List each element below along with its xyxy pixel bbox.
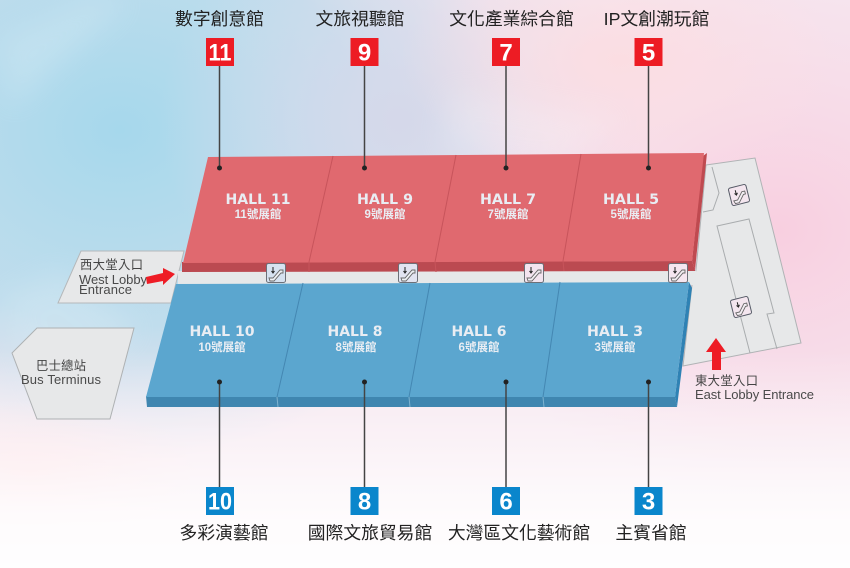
- text: west lobby label: [79, 258, 148, 297]
- text: bus terminus label: 巴士總站: [36, 358, 86, 373]
- hall 11 label: 11號展館: [235, 207, 281, 221]
- icon: escalator 6: [730, 296, 752, 318]
- text: east lobby label: East Lobby Entrance: [695, 387, 814, 402]
- callout: hall 7: 7: [499, 40, 513, 66]
- text: east lobby label: 東大堂入口: [695, 374, 758, 388]
- panel: central corridor: [178, 271, 696, 285]
- panel: bus terminus: [12, 328, 134, 419]
- hall 6 label: [452, 324, 506, 354]
- callout: hall 3: [615, 380, 687, 543]
- callout: hall 7: 文化產業綜合館: [449, 9, 574, 29]
- callout: hall 9: [316, 9, 404, 170]
- callout: hall 8: 國際文旅貿易館: [308, 523, 432, 543]
- callout: hall 8: [308, 380, 432, 543]
- callout: hall 6: 大灣區文化藝術館: [448, 523, 590, 543]
- callout: hall 9: 9: [358, 40, 371, 66]
- hall 3 label: HALL 3: [587, 324, 643, 340]
- hall 6 label: HALL 6: [452, 324, 506, 340]
- hall 8 label: 8號展館: [336, 340, 376, 354]
- text: bus terminus label: Bus Terminus: [21, 372, 102, 387]
- text: west lobby label: Entrance: [79, 282, 132, 297]
- callout: hall 10: 多彩演藝館: [180, 523, 268, 543]
- blue hall front face: [146, 396, 677, 407]
- blue hall roof: [146, 282, 689, 397]
- hall 9 label: 9號展館: [365, 207, 405, 221]
- hall 7 label: [480, 192, 536, 221]
- hall 8 label: [328, 324, 382, 354]
- callout: hall 6: 6: [499, 488, 513, 516]
- hall 6 label: 6號展館: [459, 340, 499, 354]
- callout: hall 5: 5: [642, 40, 655, 66]
- icon: escalator 3: [524, 264, 544, 282]
- callout: hall 10: [180, 380, 268, 543]
- hall 11 label: HALL 11: [226, 192, 290, 208]
- red hall side face: [692, 153, 707, 270]
- hall 5 label: HALL 5: [603, 192, 659, 208]
- hall 11 label: [226, 192, 290, 221]
- callout: hall 11: 數字創意館: [175, 9, 264, 29]
- hall 8 label: HALL 8: [328, 324, 382, 340]
- icon: escalator 4: [668, 264, 688, 282]
- blue hall side face: [675, 282, 692, 407]
- hall 5 label: 5號展館: [611, 207, 651, 221]
- callout: hall 8: 8: [358, 488, 371, 516]
- icon: escalator 2: [398, 264, 418, 282]
- panel: east lobby: [683, 158, 801, 366]
- hall 9 label: [357, 192, 413, 221]
- red hall front face: [182, 261, 695, 272]
- callout: hall 5: [604, 9, 709, 170]
- hall 10 label: [190, 324, 255, 354]
- icon: escalator 5: [728, 184, 750, 206]
- icon: escalator 1: [266, 264, 286, 282]
- arrow: east entrance: [706, 338, 726, 370]
- hall 3 label: [587, 324, 643, 354]
- hall 7 label: 7號展館: [488, 207, 528, 221]
- callout: hall 10: 10: [208, 488, 232, 516]
- callout: hall 3: 主賓省館: [615, 523, 687, 543]
- text: east lobby label: [695, 374, 814, 402]
- callout: hall 6: [448, 380, 590, 543]
- panel: blue halls: [146, 282, 692, 407]
- callout: hall 3: 3: [642, 488, 655, 516]
- callout: hall 9: 文旅視聽館: [316, 9, 404, 29]
- callout: hall 11: [175, 9, 264, 170]
- hall 5 label: [603, 192, 659, 221]
- text: west lobby label: 西大堂入口: [80, 258, 143, 272]
- text: west lobby label: West Lobby: [79, 272, 148, 287]
- callout: hall 11: 11: [208, 40, 232, 66]
- panel: red halls: [182, 153, 707, 272]
- hall 9 label: HALL 9: [357, 192, 413, 208]
- hall 7 label: HALL 7: [480, 192, 536, 208]
- callout: hall 7: [449, 9, 574, 170]
- arrow: west entrance: [146, 268, 175, 285]
- red hall roof: [183, 153, 704, 263]
- hall 10 label: HALL 10: [190, 324, 255, 340]
- hall 10 label: 10號展館: [198, 340, 246, 354]
- hall 3 label: 3號展館: [595, 340, 635, 354]
- callout: hall 5: IP文創潮玩館: [604, 9, 709, 29]
- panel: west lobby entrance: [58, 251, 184, 303]
- text: bus terminus label: [21, 358, 102, 387]
